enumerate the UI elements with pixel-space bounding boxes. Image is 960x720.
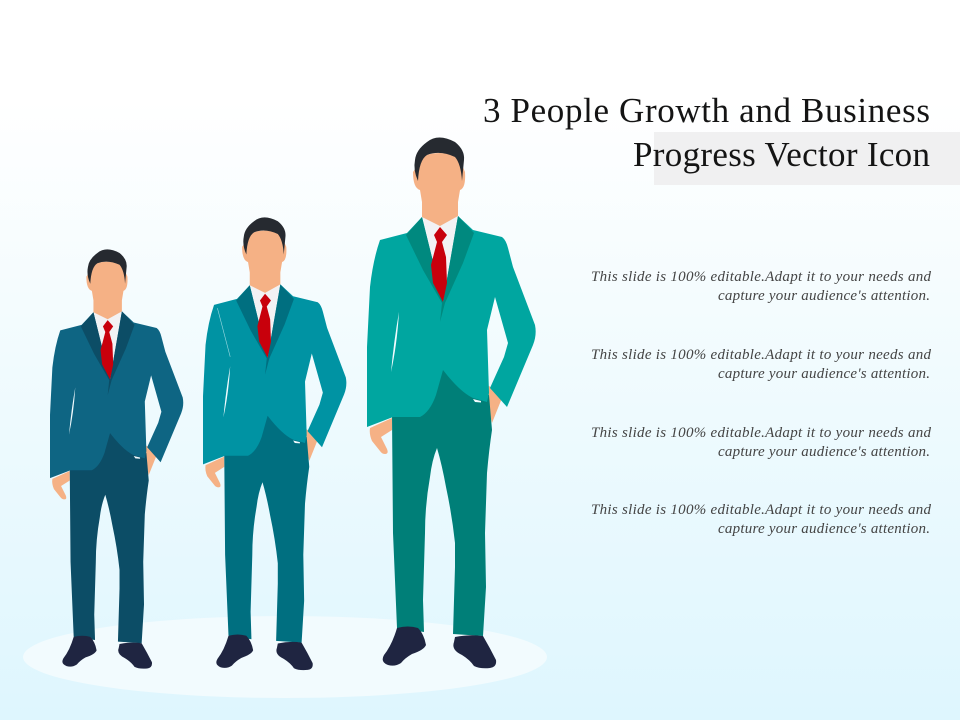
text block 4: capture your audience's attention. xyxy=(718,521,930,537)
title: Progress Vector Icon xyxy=(633,135,930,174)
text block 4: This slide is 100% editable.Adapt it to your needs and xyxy=(591,502,932,518)
text block 1: capture your audience's attention. xyxy=(718,288,930,304)
text block 1 xyxy=(591,269,932,304)
floor ellipse xyxy=(23,616,547,698)
text block 2: This slide is 100% editable.Adapt it to your needs and xyxy=(591,347,932,363)
title: 3 People Growth and Business xyxy=(483,91,930,130)
text block 3: capture your audience's attention. xyxy=(718,444,930,460)
person: small, dark blue suit xyxy=(50,249,183,669)
title xyxy=(483,91,930,174)
text block 2 xyxy=(591,347,932,382)
text block 3 xyxy=(591,425,932,460)
person: tall, green-teal suit xyxy=(367,138,536,668)
text block 3: This slide is 100% editable.Adapt it to your needs and xyxy=(591,425,932,441)
text block 2: capture your audience's attention. xyxy=(718,366,930,382)
description text blocks xyxy=(591,269,932,537)
person: medium, teal-blue suit xyxy=(203,217,346,670)
title highlight box xyxy=(654,132,960,185)
text block 4 xyxy=(591,502,932,537)
text block 1: This slide is 100% editable.Adapt it to your needs and xyxy=(591,269,932,285)
